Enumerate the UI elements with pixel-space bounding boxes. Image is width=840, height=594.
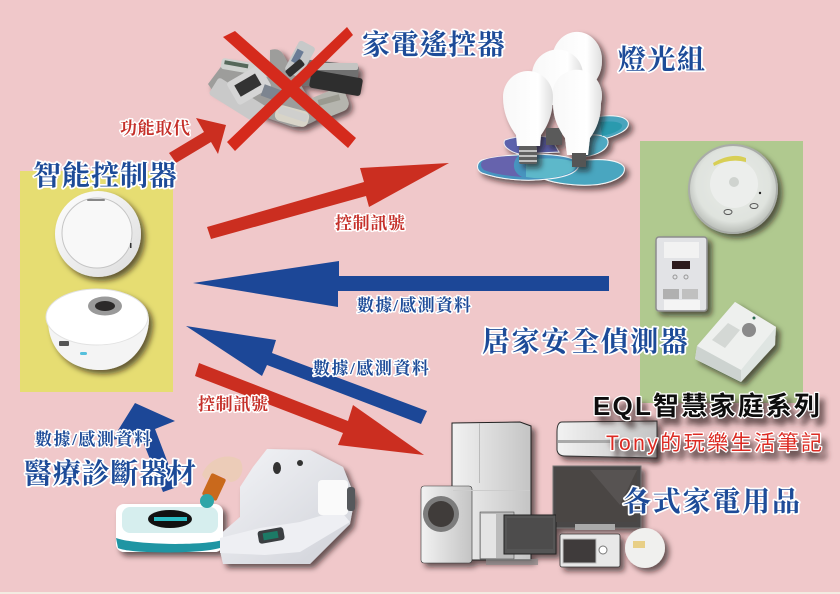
icon: wall alarm box xyxy=(695,302,776,382)
panel: sensors backdrop xyxy=(640,141,803,403)
label: sensor data top: 數據/感測資料 xyxy=(357,295,471,315)
title: EQL smart home series: EQL智慧家庭系列 xyxy=(593,391,820,421)
icon: red cross xyxy=(223,27,356,151)
heading: medical diagnostics: 醫療診斷器材 xyxy=(24,457,196,490)
icon: ceiling smoke detector xyxy=(689,145,777,233)
arrow: sensor data to controller xyxy=(193,261,609,307)
arrow: control signal to lights xyxy=(207,163,449,239)
icon: smart controller with camera xyxy=(46,289,149,370)
heading: lighting: 燈光組 xyxy=(618,44,705,76)
heading: smart controller: 智能控制器 xyxy=(33,160,178,192)
icon: home appliances xyxy=(421,421,665,568)
heading: home safety detectors: 居家安全偵測器 xyxy=(482,326,689,358)
heading: remote controls: 家電遙控器 xyxy=(362,29,506,61)
icon: smart controller round xyxy=(55,191,141,277)
arrow: appliance data to controller xyxy=(186,326,427,424)
label: control signal to lights: 控制訊號 xyxy=(335,213,405,233)
icon: gas alarm xyxy=(656,237,707,311)
label: medical data: 數據/感測資料 xyxy=(35,429,151,449)
icon: pile of remote controls xyxy=(208,40,363,128)
arrow: medical data to controller xyxy=(112,403,177,492)
label: control signal to appliances: 控制訊號 xyxy=(198,394,268,414)
icon: light bulbs on puddles xyxy=(478,32,628,185)
arrow: control signal to appliances xyxy=(195,363,424,455)
icon: medical diagnostics xyxy=(116,449,355,564)
panel: controller backdrop xyxy=(20,171,173,392)
label: function replacement: 功能取代 xyxy=(120,119,190,138)
subtitle: blog name: Tony的玩樂生活筆記 xyxy=(606,432,822,455)
arrow: controller to remotes xyxy=(169,118,226,163)
heading: home appliances: 各式家電用品 xyxy=(623,486,800,518)
label: appliance data: 數據/感測資料 xyxy=(313,358,429,378)
